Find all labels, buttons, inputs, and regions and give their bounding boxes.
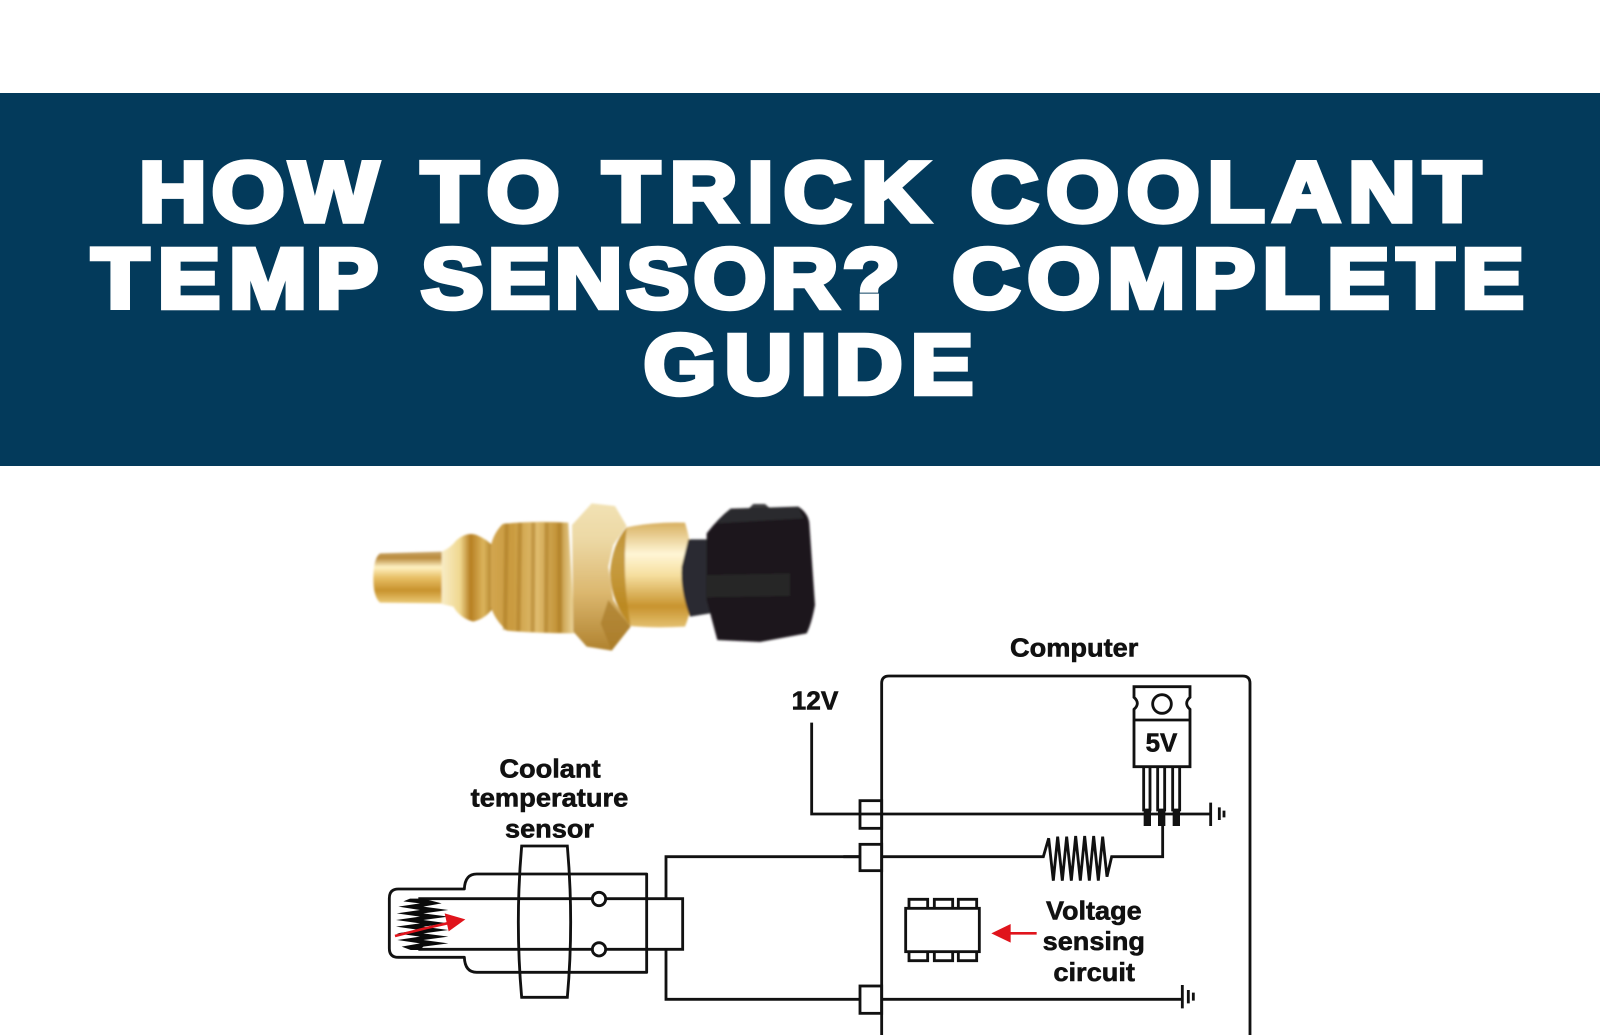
title text: TRICK xyxy=(603,145,929,239)
title text: HOW xyxy=(139,145,378,239)
12V label: 12V xyxy=(792,685,839,715)
title text: COMPLETE xyxy=(952,232,1524,326)
ground wire xyxy=(882,995,1182,1004)
5V regulator: 5V xyxy=(1146,728,1178,758)
sensor diagram xyxy=(389,753,860,999)
sensor label: sensor xyxy=(505,814,594,844)
title text: GUIDE xyxy=(644,318,973,411)
title text: SENSOR? xyxy=(421,232,900,326)
title text: TO xyxy=(421,145,559,239)
title text: TEMP xyxy=(92,232,378,326)
ground symbol 2 xyxy=(1182,985,1193,1008)
12V wire xyxy=(812,723,1210,814)
thermistor xyxy=(396,899,448,950)
threaded section xyxy=(491,522,575,633)
connector pin 3 xyxy=(860,986,882,1013)
voltage sensing label: sensing xyxy=(1043,926,1145,956)
title text: COOLANT xyxy=(971,145,1481,239)
banner background xyxy=(0,93,1600,466)
signal line with resistor xyxy=(843,826,1163,881)
connector xyxy=(707,504,815,642)
signal wires xyxy=(666,857,860,999)
voltage sensing label: Voltage xyxy=(1046,895,1142,925)
voltage sensing label: circuit xyxy=(1053,957,1135,987)
5V regulator xyxy=(1134,687,1190,826)
sensor collar xyxy=(442,534,494,622)
connector pin 1 xyxy=(860,801,882,828)
ground symbol 1 xyxy=(1211,803,1224,826)
sensor label: Coolant xyxy=(499,753,601,783)
sensor label: temperature xyxy=(471,783,628,813)
sensor photo xyxy=(373,503,815,651)
computer label: Computer xyxy=(1010,633,1138,663)
sensor outline xyxy=(389,874,647,972)
rubber neck xyxy=(681,539,710,617)
terminal contacts xyxy=(592,892,606,956)
barrel xyxy=(610,523,693,627)
computer enclosure xyxy=(882,676,1250,1035)
sensor tip xyxy=(373,552,443,603)
red arrow to chip xyxy=(991,924,1037,943)
voltage sensing label xyxy=(1043,895,1145,987)
sensor inner terminals xyxy=(418,899,683,949)
title banner xyxy=(0,93,1600,466)
connector pin 2 xyxy=(860,844,882,871)
hex nut xyxy=(572,503,631,651)
sensor label xyxy=(471,753,628,844)
title text xyxy=(92,145,1524,411)
red heat arrow xyxy=(395,913,465,936)
sensor flange xyxy=(518,846,571,997)
voltage sensing chip xyxy=(906,899,979,961)
computer circuit xyxy=(792,633,1250,1035)
